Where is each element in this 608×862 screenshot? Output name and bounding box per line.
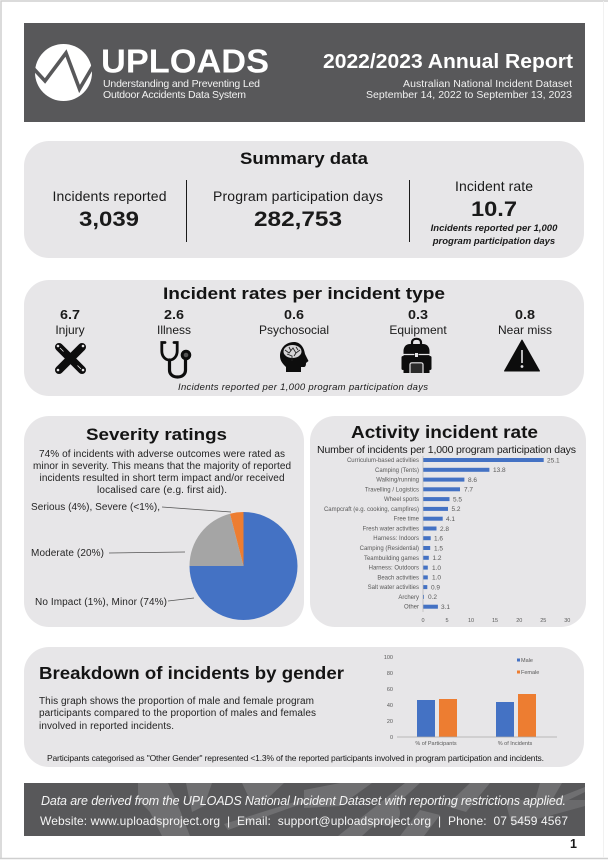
gender description: involved in reported incidents. [39, 721, 174, 732]
report dataset and dates: Australian National Incident Dataset [403, 78, 572, 90]
panel: breakdown by gender [24, 647, 584, 767]
page number: 1 [570, 837, 577, 851]
bar chart: activity rates: Wheel sports [384, 497, 419, 503]
bar chart: activity rates: Archery [398, 595, 419, 601]
stat: incident rate: program participation days [432, 236, 555, 247]
heading: breakdown by gender: Breakdown of incidents by gender [39, 663, 344, 683]
stat: near miss: 0.8 [515, 307, 535, 322]
stat: program participation days: 282,753 [254, 207, 342, 231]
bar chart: activity rates: Teambuilding games [364, 556, 419, 562]
pie labels: Serious (4%), Severe (<1%), [31, 502, 160, 513]
bar chart: activity rates: 7.7 [464, 487, 473, 494]
icon: warning triangle [504, 340, 540, 371]
bar chart: activity rates: 13.8 [493, 467, 506, 474]
heading: activity incident rate: Activity incident rate [351, 422, 538, 442]
logo tagline [103, 78, 260, 101]
panel: incident rates per incident type [24, 280, 584, 396]
bar chart: activity rates: 0.2 [428, 594, 437, 601]
bar chart: activity rates: 2.8 [440, 526, 449, 533]
stat: near miss: Near miss [498, 323, 552, 337]
bar chart: gender: 40 [387, 703, 393, 709]
stat: equipment: 0.3 [408, 307, 428, 322]
panel: summary data [24, 141, 584, 258]
logo tagline: Outdoor Accidents Data System [103, 89, 246, 101]
stat: incident rate: Incidents reported per 1,000 [431, 223, 558, 234]
stat: incident rate: Incident rate [455, 178, 533, 194]
heading: summary data: Summary data [240, 150, 369, 168]
bar chart: gender: % of Incidents [498, 741, 533, 747]
icon: crossed bandages [57, 345, 84, 371]
severity description: 74% of incidents with adverse outcomes were rated as [39, 449, 285, 460]
stat: equipment: Equipment [389, 323, 447, 337]
logo tagline: Understanding and Preventing Led [103, 78, 260, 90]
stat: incidents reported [52, 188, 166, 231]
note: rate unit: Incidents reported per 1,000 program participation days [178, 382, 428, 393]
report title: 2022/2023 Annual Report [323, 50, 573, 73]
stat: injury: 6.7 [60, 307, 80, 322]
bar chart: activity rates: 10 [468, 618, 474, 624]
pie chart: severity [190, 512, 298, 620]
stat: program participation days: Program participation days [213, 188, 383, 204]
bar chart: activity rates: 25.1 [547, 457, 560, 464]
severity description: incidents resulted in short term impact and/or received [40, 473, 284, 484]
stat: illness: 2.6 [164, 307, 184, 322]
bar chart: activity rates: Free time [394, 517, 420, 523]
stat: psychosocial: Psychosocial [259, 323, 329, 337]
bar chart: activity rates: 3.1 [441, 604, 450, 611]
bar chart: activity rates: 1.0 [432, 575, 441, 582]
bar chart: activity rates: 8.6 [468, 477, 477, 484]
stat: equipment [389, 307, 447, 337]
bar chart: activity rates: Fresh water activities [363, 526, 419, 532]
bar chart: activity rates: Curriculum-based activities [347, 458, 419, 464]
bar chart: activity rates: 4.1 [446, 516, 455, 523]
bar chart: activity rates: 15 [492, 618, 498, 624]
gender description: participants compared to the proportion of males and females [39, 708, 316, 719]
bar chart: gender [384, 655, 557, 747]
severity description: localised care (e.g. first aid). [97, 485, 227, 496]
bar chart: activity rates: Camping (Tents) [375, 468, 419, 474]
note: other gender: Participants categorised as "Other Gender" represented <1.3% of the reported participants involved in program participation and incidents. [47, 753, 544, 763]
footer banner [24, 783, 585, 836]
bar chart: activity rates: Harness: Indoors [373, 536, 419, 542]
bar chart: gender: 100 [384, 655, 393, 661]
report dataset and dates [366, 78, 572, 101]
report dataset and dates: September 14, 2022 to September 13, 2023 [366, 89, 572, 101]
pie labels [31, 502, 231, 608]
stat: incident rate [431, 178, 558, 247]
gender description: This graph shows the proportion of male and female program [39, 696, 314, 707]
bar chart: activity rates: Camping (Residential) [360, 546, 419, 552]
heading: severity ratings: Severity ratings [86, 425, 227, 444]
bar chart: gender: 0 [390, 735, 393, 741]
bar chart: activity rates: Beach activities [377, 575, 419, 581]
bar chart: gender: 80 [387, 671, 393, 677]
logo wordmark: UPLOADS [101, 42, 269, 80]
stat: injury [55, 307, 85, 337]
pie labels: Moderate (20%) [31, 548, 104, 559]
bar chart: activity rates: 25 [540, 618, 546, 624]
bar chart: gender: % of Participants [415, 741, 457, 747]
bar chart: activity rates: 1.2 [432, 555, 442, 562]
pie labels: No Impact (1%), Minor (74%) [35, 597, 167, 608]
bar chart: activity rates: 5 [445, 618, 449, 624]
bar chart: activity rates: 1.6 [434, 536, 443, 542]
bar chart: activity rates: 5.2 [452, 506, 461, 513]
chart legend: Female [521, 670, 539, 676]
stat: injury: Injury [55, 323, 85, 337]
bar chart: activity rates: Salt water activities [368, 585, 419, 591]
chart legend [517, 658, 539, 676]
data source note: Data are derived from the UPLOADS National Incident Dataset with reporting restrictions applied. [41, 794, 566, 808]
stat: program participation days [213, 188, 383, 231]
bar chart: activity rates: Travelling / Logistics [365, 487, 419, 493]
bar chart: activity rates: 5.5 [453, 496, 462, 503]
bar chart: activity rates: Other [404, 605, 419, 611]
heading: incident rates: Incident rates per incident type [163, 284, 445, 303]
bar chart: activity rates: Walking/running [376, 478, 419, 484]
stat: incidents reported: Incidents reported [52, 188, 166, 204]
gender description [39, 696, 316, 732]
bar chart: activity rates: Campcraft (e.g. cooking, campfires) [324, 507, 419, 513]
bar chart: activity rates: 1.0 [432, 565, 441, 572]
panel: activity incident rate [310, 416, 586, 627]
icon: head with brain [280, 342, 308, 372]
chart subtitle: Number of incidents per 1,000 program participation days [317, 444, 576, 456]
bar chart: activity rates: Harness: Outdoors [369, 566, 419, 572]
header banner [24, 23, 585, 122]
bar chart: gender: 60 [387, 687, 393, 693]
stat: incidents reported: 3,039 [79, 207, 139, 231]
stat: incident rate: 10.7 [471, 197, 517, 221]
icon: UPLOADS logo [34, 44, 93, 101]
panel: severity ratings [24, 416, 304, 627]
bar chart: activity rates: 1.5 [434, 545, 443, 552]
chart legend: Male [521, 658, 533, 664]
bar chart: activity rates: 0 [421, 618, 425, 624]
stat: psychosocial [259, 307, 329, 337]
stat: illness [157, 307, 191, 337]
stat: illness: Illness [157, 323, 191, 337]
icon: stethoscope [162, 342, 190, 377]
severity description: minor in severity. This means that the majority of reported [33, 461, 291, 472]
stat: near miss [498, 307, 552, 337]
bar chart: activity rates [324, 456, 570, 624]
bar chart: activity rates: 20 [516, 618, 522, 624]
bar chart: activity rates: 30 [564, 618, 570, 624]
bar chart: activity rates: 0.9 [431, 584, 440, 591]
stat: psychosocial: 0.6 [284, 307, 304, 322]
bar chart: gender: 20 [387, 719, 393, 725]
severity description [33, 449, 291, 496]
icon: backpack [402, 339, 432, 373]
contact details: Website: www.uploadsproject.org | Email: support@uploadsproject.org | Phone: 07 5459 4567 [40, 814, 568, 828]
